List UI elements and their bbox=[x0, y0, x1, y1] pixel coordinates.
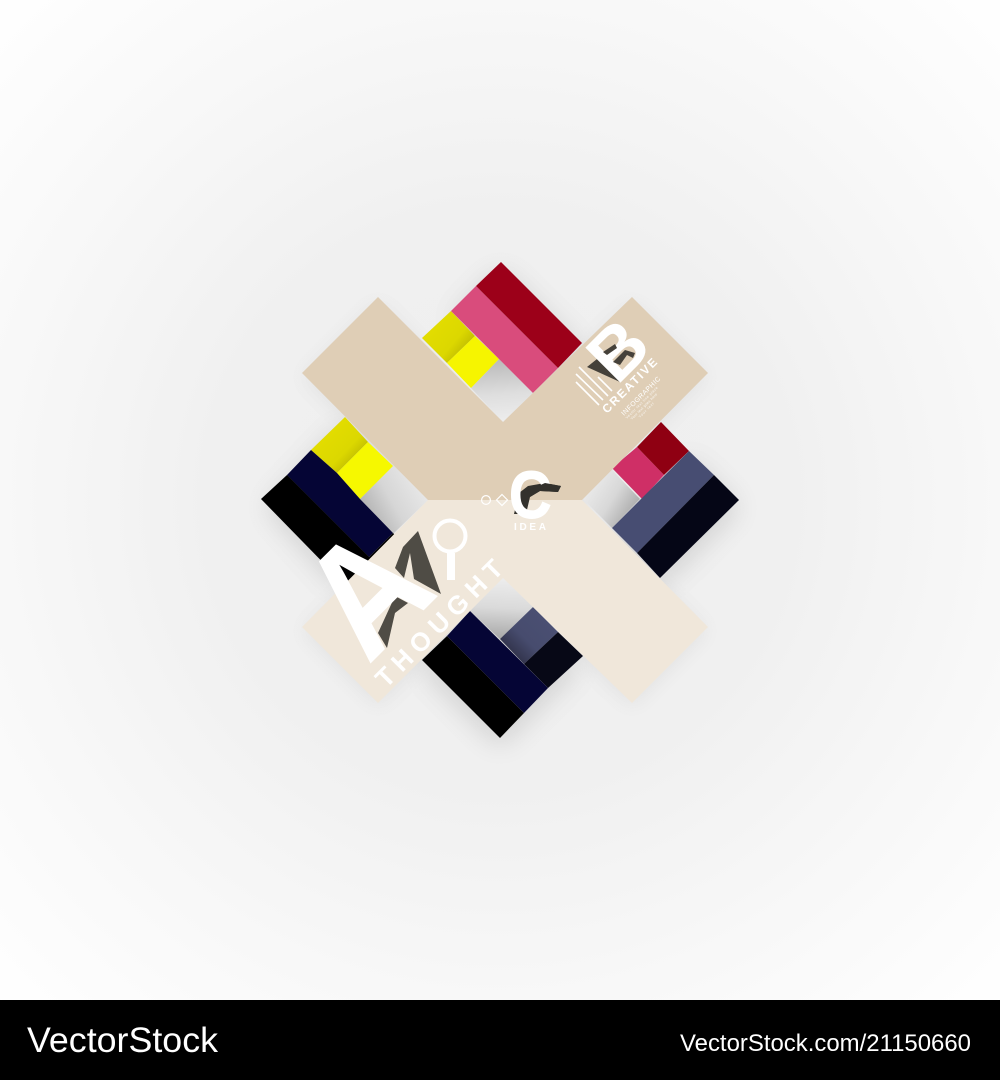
stripe dark yellow left bbox=[311, 417, 368, 473]
letter C: C bbox=[509, 459, 552, 533]
gap shading top bbox=[471, 359, 533, 423]
soft shadow under stripes bbox=[267, 270, 739, 746]
stripe pink top bbox=[451, 286, 558, 393]
stripe crimson top bbox=[476, 262, 582, 368]
panel: right colour diamond bbox=[583, 422, 739, 578]
panel: lower cream ribbon bbox=[302, 500, 708, 703]
stripe navy bottom bbox=[447, 611, 548, 713]
icon: dark strokes in B bbox=[603, 344, 635, 365]
letter A: A bbox=[267, 492, 464, 690]
icon: diamond marker bbox=[496, 494, 508, 506]
footer bar bbox=[0, 1000, 1000, 1080]
stripe bright yellow top bbox=[447, 336, 499, 388]
icon: dark letter shadow A bbox=[378, 531, 441, 648]
icon: diagonal lines bbox=[576, 367, 612, 405]
stripe pink right bbox=[612, 447, 664, 499]
label THOUGHT: THOUGHT bbox=[369, 553, 509, 693]
gap shading right bbox=[583, 470, 640, 528]
stripe bright yellow left bbox=[337, 442, 393, 499]
section B: creative bbox=[572, 304, 665, 421]
panel: bottom colour diamond bbox=[422, 577, 583, 738]
stripe navy left bbox=[287, 450, 393, 557]
stripe black-blue bottom bbox=[524, 632, 583, 688]
letter B: B bbox=[572, 304, 665, 397]
label CREATIVE: CREATIVE bbox=[599, 355, 660, 416]
icon: dark wedge bbox=[587, 359, 620, 382]
gap shading bottom bbox=[470, 577, 533, 639]
stripe slate right bbox=[612, 451, 714, 553]
soft shadow under ribbons bbox=[302, 301, 708, 707]
icon: dark swoosh bbox=[514, 483, 561, 514]
icon: magnifier bbox=[434, 520, 466, 580]
fine print: Your text goes here bbox=[630, 392, 658, 421]
stripe black bottom bbox=[422, 636, 524, 738]
stripe black right bbox=[637, 475, 739, 578]
fine print: Vector text line place bbox=[625, 386, 659, 420]
stripe dark yellow top bbox=[422, 311, 475, 363]
panel: left colour diamond bbox=[261, 417, 428, 600]
icon: circle marker bbox=[482, 496, 490, 504]
panel: upper beige ribbon bbox=[302, 297, 708, 500]
section A: thought bbox=[267, 492, 509, 693]
logo wordmark: VectorStock bbox=[27, 1021, 219, 1060]
swoosh tip over letter bbox=[527, 483, 561, 497]
stripe dark red right bbox=[637, 422, 689, 475]
label INFOGRAPHIC: INFOGRAPHIC bbox=[620, 376, 662, 417]
panel: top colour diamond bbox=[422, 262, 582, 423]
gap shading left bbox=[360, 466, 428, 534]
fine print: Your text bbox=[638, 402, 655, 419]
stripe black left bbox=[261, 475, 393, 583]
section C: idea bbox=[482, 459, 561, 533]
label IDEA: IDEA bbox=[514, 522, 546, 533]
stripe slate bottom bbox=[500, 607, 558, 664]
image id: VectorStock.com/21150660 bbox=[680, 1030, 971, 1057]
